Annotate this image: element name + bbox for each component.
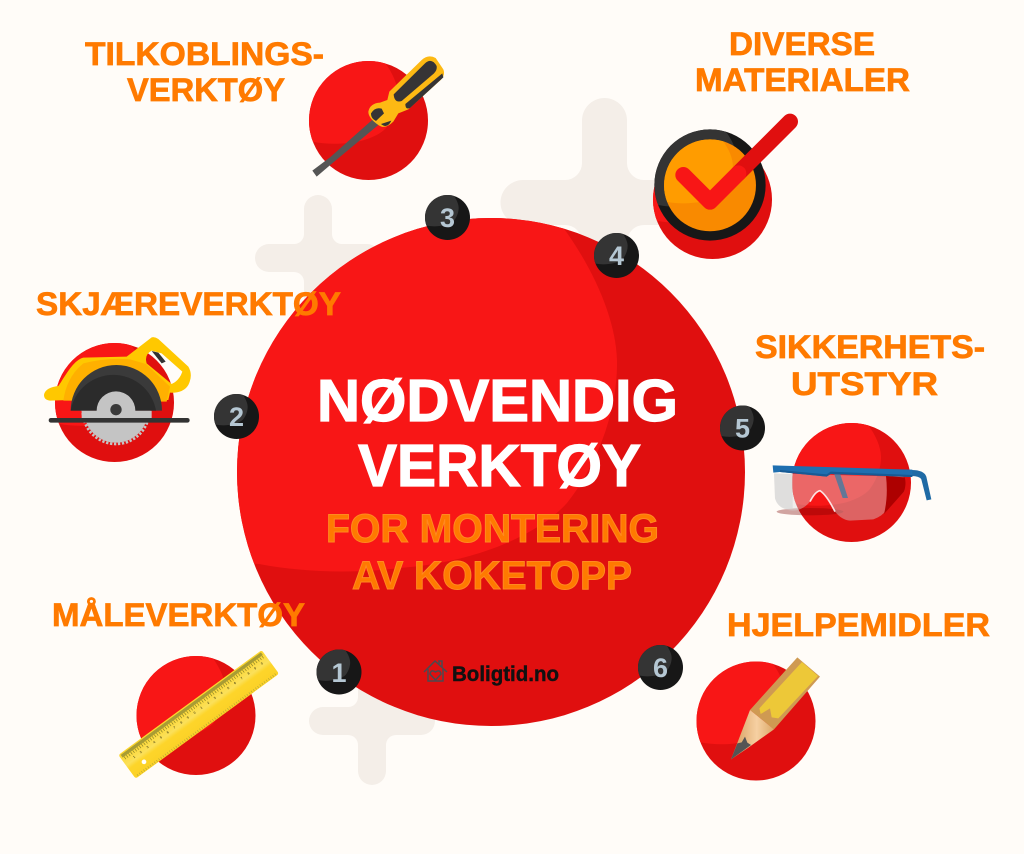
icon: ruler: 12345678901234567890 — [132, 661, 264, 759]
label: diverse materialer: DIVERSE — [729, 26, 875, 62]
subtitle: FOR MONTERING — [326, 507, 659, 551]
background plus shapes — [255, 98, 708, 785]
icon: safety glasses — [773, 412, 931, 542]
icon: ruler — [118, 645, 279, 779]
number badge 1 — [312, 645, 362, 695]
title — [317, 368, 678, 499]
number badge 5: 5 — [735, 414, 750, 444]
icon: screwdriver — [298, 50, 444, 180]
number badge 3 — [421, 191, 470, 240]
title: VERKTØY — [358, 433, 641, 499]
label: tilkoblingsverktøy: TILKOBLINGS- — [85, 36, 324, 72]
subtitle — [326, 507, 659, 598]
number badge 4 — [590, 229, 639, 278]
number badge 4: 4 — [609, 241, 624, 271]
number badge 2 — [210, 390, 259, 439]
label: sikkerhetsutstyr: SIKKERHETS- — [755, 329, 985, 365]
label: skjæreverktøy: SKJÆREVERKTØY — [36, 286, 341, 322]
label: hjelpemidler: HJELPEMIDLER — [727, 607, 990, 643]
title: NØDVENDIG — [317, 368, 678, 434]
icon: check mark badge — [642, 119, 790, 259]
subtitle: AV KOKETOPP — [352, 554, 632, 598]
number badge 5 — [716, 401, 765, 451]
number badge 1: 1 — [331, 658, 347, 688]
label: tilkoblingsverktøy: VERKTØY — [127, 72, 285, 108]
label: sikkerhetsutstyr: UTSTYR — [791, 366, 938, 402]
label: sikkerhetsutstyr — [755, 329, 985, 402]
label: diverse materialer: MATERIALER — [695, 62, 910, 98]
label: tilkoblingsverktøy — [85, 36, 324, 108]
label: måleverktøy: MÅLEVERKTØY — [52, 597, 305, 633]
number badge 2: 2 — [229, 402, 244, 432]
label: diverse materialer — [695, 26, 910, 98]
icon: circular saw — [44, 332, 191, 462]
number badge 3: 3 — [440, 203, 455, 233]
logo: Boligtid.no: Boligtid.no — [452, 663, 559, 686]
icon: pencil — [686, 651, 820, 781]
central red circle — [191, 172, 745, 726]
number badge 6 — [634, 641, 683, 690]
number badge 6: 6 — [653, 653, 668, 683]
